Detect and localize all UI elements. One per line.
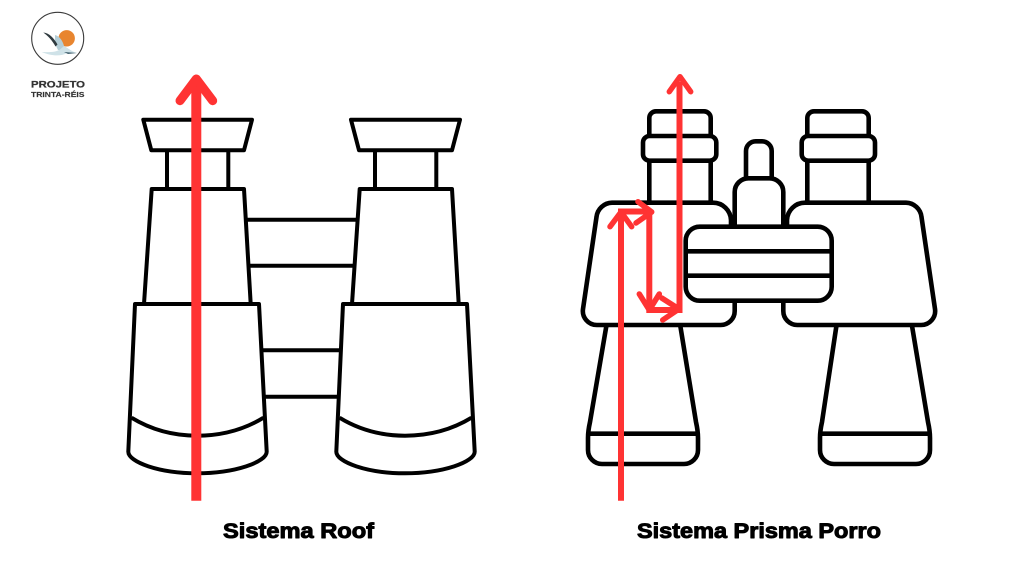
logo: Projeto Trinta-Réis: TRINTA-RÉIS xyxy=(31,90,84,99)
logo: Projeto Trinta-Réis xyxy=(31,12,86,99)
caption: Sistema Roof: Sistema Roof xyxy=(223,519,375,543)
porro right prism housing xyxy=(783,203,935,325)
porro left prism housing xyxy=(583,203,735,325)
porro lower right barrel xyxy=(820,324,930,464)
logo text: PROJETO xyxy=(31,79,86,90)
porro center focus knob xyxy=(735,141,783,232)
porro left eyepiece xyxy=(643,111,716,205)
logo emblem circle with sun and bird xyxy=(32,12,84,64)
roof bridge bars xyxy=(245,220,357,397)
porro central bridge pad xyxy=(686,227,832,301)
panel: Sistema Roof binoculars xyxy=(128,79,475,501)
roof light path arrow xyxy=(180,79,213,501)
roof left barrel xyxy=(128,120,267,473)
porro right eyepiece xyxy=(802,111,875,205)
porro lower left barrel xyxy=(588,324,698,464)
porro folded light path arrows xyxy=(610,77,691,501)
roof right barrel xyxy=(336,120,475,473)
panel: Sistema Prisma Porro binoculars xyxy=(583,77,935,501)
caption: Sistema Prisma Porro: Sistema Prisma Porro xyxy=(637,519,881,543)
